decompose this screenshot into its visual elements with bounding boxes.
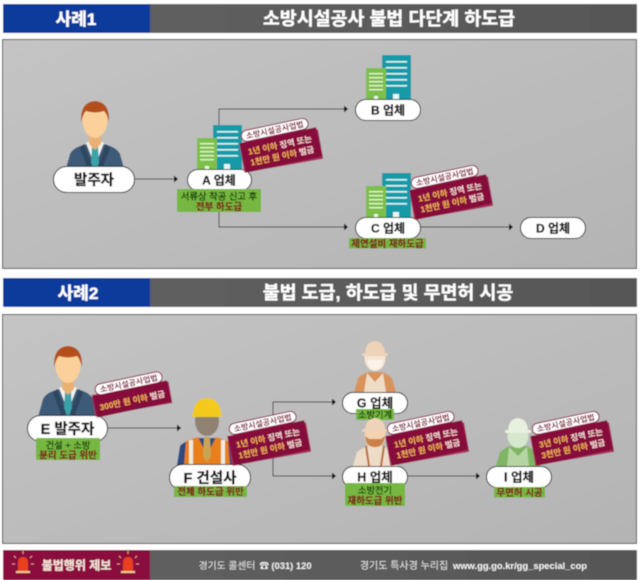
penalty badge: company A: 소방시설공사업법 xyxy=(245,119,305,141)
header: case 2: 사례2 xyxy=(58,284,98,303)
connector lines: case 1 xyxy=(135,106,513,230)
footer: 경기도 특사경 누리집 xyxy=(360,559,448,572)
note: company C: 제연설비 재하도급 xyxy=(351,238,424,250)
penalty badge: company I: 소방시설공사업법 xyxy=(536,412,596,434)
icon: building A xyxy=(197,125,242,170)
penalty badge: company H: 1천만 원 이하 벌금 xyxy=(395,437,461,461)
icon: hard-hat worker F xyxy=(177,398,237,465)
label: client xyxy=(54,166,134,192)
note: contractor F: 전체 하도급 위반 xyxy=(177,486,244,498)
label: company H: H 업체 xyxy=(357,470,393,484)
note: company H xyxy=(345,483,405,507)
label: client: 발주자 xyxy=(74,172,115,189)
penalty badge: contractor F: 1년 이하 징역 또는 xyxy=(235,426,301,450)
label: company D: D 업체 xyxy=(536,222,570,236)
penalty badge: client E: 300만 원 이하 벌금 xyxy=(99,389,166,412)
note: company A: 전부 하도급 xyxy=(196,201,242,213)
note: client E: 분리 도급 위반 xyxy=(39,450,97,462)
footer: ☎ (031) 120 xyxy=(259,560,312,571)
penalty badge: company H: 1년 이하 징역 또는 xyxy=(393,426,459,450)
penalty badge: company I xyxy=(527,409,615,468)
footer: www.gg.go.kr/gg_special_cop xyxy=(452,560,587,571)
penalty badge: company H xyxy=(382,409,470,468)
footer xyxy=(3,550,637,580)
note: company G: 소방기계 xyxy=(358,409,392,420)
note: client E xyxy=(36,438,100,462)
label: company A: A 업체 xyxy=(202,174,236,188)
label: company I xyxy=(486,466,552,488)
icon: siren right xyxy=(117,551,139,573)
label: company B xyxy=(356,100,420,120)
label: company D xyxy=(520,218,586,238)
label: company H xyxy=(342,466,408,488)
penalty badge: company C: 1천만 원 이하 벌금 xyxy=(419,191,485,215)
label: contractor F: F 건설사 xyxy=(184,470,237,487)
icon: siren left xyxy=(12,551,34,573)
penalty badge: company H: 소방시설공사업법 xyxy=(391,412,451,434)
label: contractor F xyxy=(170,464,250,490)
icon: worker G xyxy=(354,341,396,392)
label: client E: E 발주자 xyxy=(41,421,95,438)
note: client E: 건설 + 소방 xyxy=(46,440,91,450)
note: company H: 재하도급 위반 xyxy=(347,495,403,507)
label: company C xyxy=(356,218,420,238)
icon: client E person xyxy=(38,346,98,417)
header: case 2 xyxy=(3,278,637,307)
penalty badge: contractor F xyxy=(224,409,312,468)
penalty badge: company A: 1년 이하 징역 또는 xyxy=(247,133,313,157)
connector lines: case 2 xyxy=(108,398,480,480)
header: case 2: 불법 도급, 하도급 및 무면허 시공 xyxy=(263,282,513,303)
note: company H: 소방전기 xyxy=(358,486,392,496)
note: company I: 무면허 시공 xyxy=(496,487,543,499)
label: company C: C 업체 xyxy=(371,222,405,236)
note: company A xyxy=(177,189,261,213)
penalty badge: company I: 3년 이하 징역 또는 xyxy=(538,426,604,450)
label: company B: B 업체 xyxy=(371,104,405,118)
icon: worker H xyxy=(353,418,397,466)
penalty badge: client E xyxy=(89,370,173,419)
panel: case 2 xyxy=(2,314,636,544)
penalty badge: company I: 3천만 원 이하 벌금 xyxy=(540,437,606,461)
icon: worker I xyxy=(496,418,540,466)
penalty badge: company A: 1천만 원 이하 벌금 xyxy=(249,144,315,168)
penalty badge: client E: 소방시설공사업법 xyxy=(99,372,159,394)
header: case 1 xyxy=(3,4,637,33)
penalty badge: company C: 1년 이하 징역 또는 xyxy=(417,180,483,204)
footer: 경기도 콜센터 xyxy=(199,559,255,572)
label: company G xyxy=(342,392,408,414)
icon: client person xyxy=(65,101,125,172)
icon: building C xyxy=(366,173,411,218)
panel: case 1 xyxy=(2,40,636,268)
penalty badge: company C xyxy=(406,163,494,222)
penalty badge: contractor F: 소방시설공사업법 xyxy=(233,412,293,434)
label: company G: G 업체 xyxy=(357,396,393,410)
label: company I: I 업체 xyxy=(504,470,534,484)
note: company A: 서류상 착공 신고 후 xyxy=(181,192,258,202)
penalty badge: company A xyxy=(236,116,324,175)
penalty badge: contractor F: 1천만 원 이하 벌금 xyxy=(237,437,303,461)
icon: building B xyxy=(366,55,411,100)
label: company A xyxy=(188,170,252,190)
header: case 1: 사례1 xyxy=(56,10,96,29)
penalty badge: company C: 소방시설공사업법 xyxy=(415,166,475,188)
footer: 불법행위 제보 xyxy=(42,558,111,572)
header: case 1: 소방시설공사 불법 다단계 하도급 xyxy=(263,8,515,29)
label: client E xyxy=(28,416,108,442)
